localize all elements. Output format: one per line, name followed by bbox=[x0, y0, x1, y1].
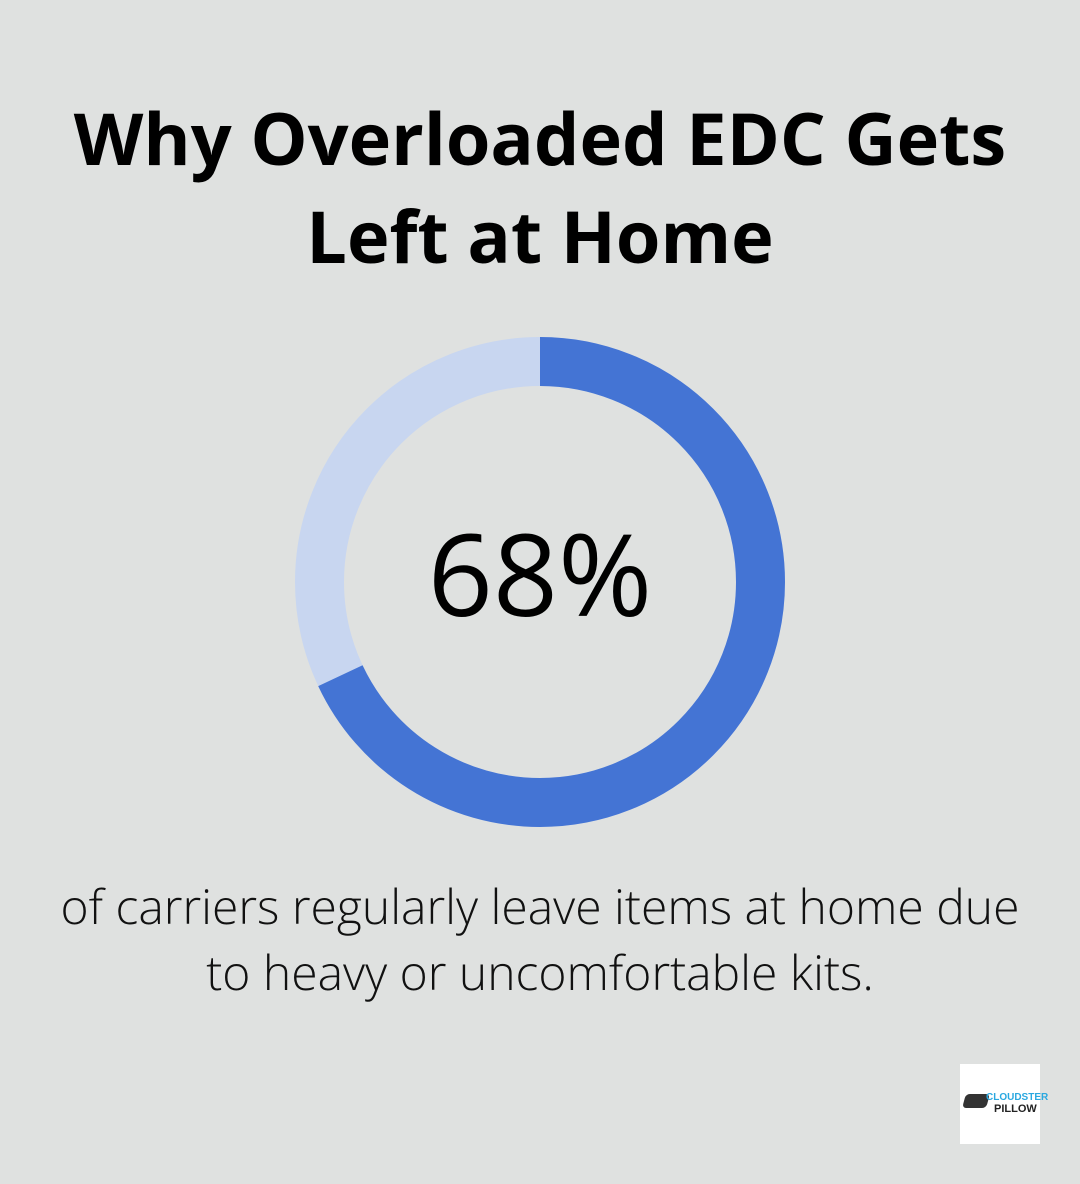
title: Left at Home bbox=[306, 187, 774, 285]
body text: of carriers regularly leave items at home due bbox=[61, 874, 1019, 939]
donut chart: 68% bbox=[428, 495, 652, 650]
title: Why Overloaded EDC Gets bbox=[74, 89, 1006, 187]
logo bbox=[960, 1064, 1040, 1144]
donut chart bbox=[295, 337, 785, 827]
logo: CLOUDSTER bbox=[986, 1092, 1048, 1103]
logo: PILLOW bbox=[994, 1103, 1037, 1115]
body text bbox=[61, 874, 1019, 1005]
title bbox=[74, 89, 1006, 285]
body text: to heavy or uncomfortable kits. bbox=[206, 940, 874, 1005]
